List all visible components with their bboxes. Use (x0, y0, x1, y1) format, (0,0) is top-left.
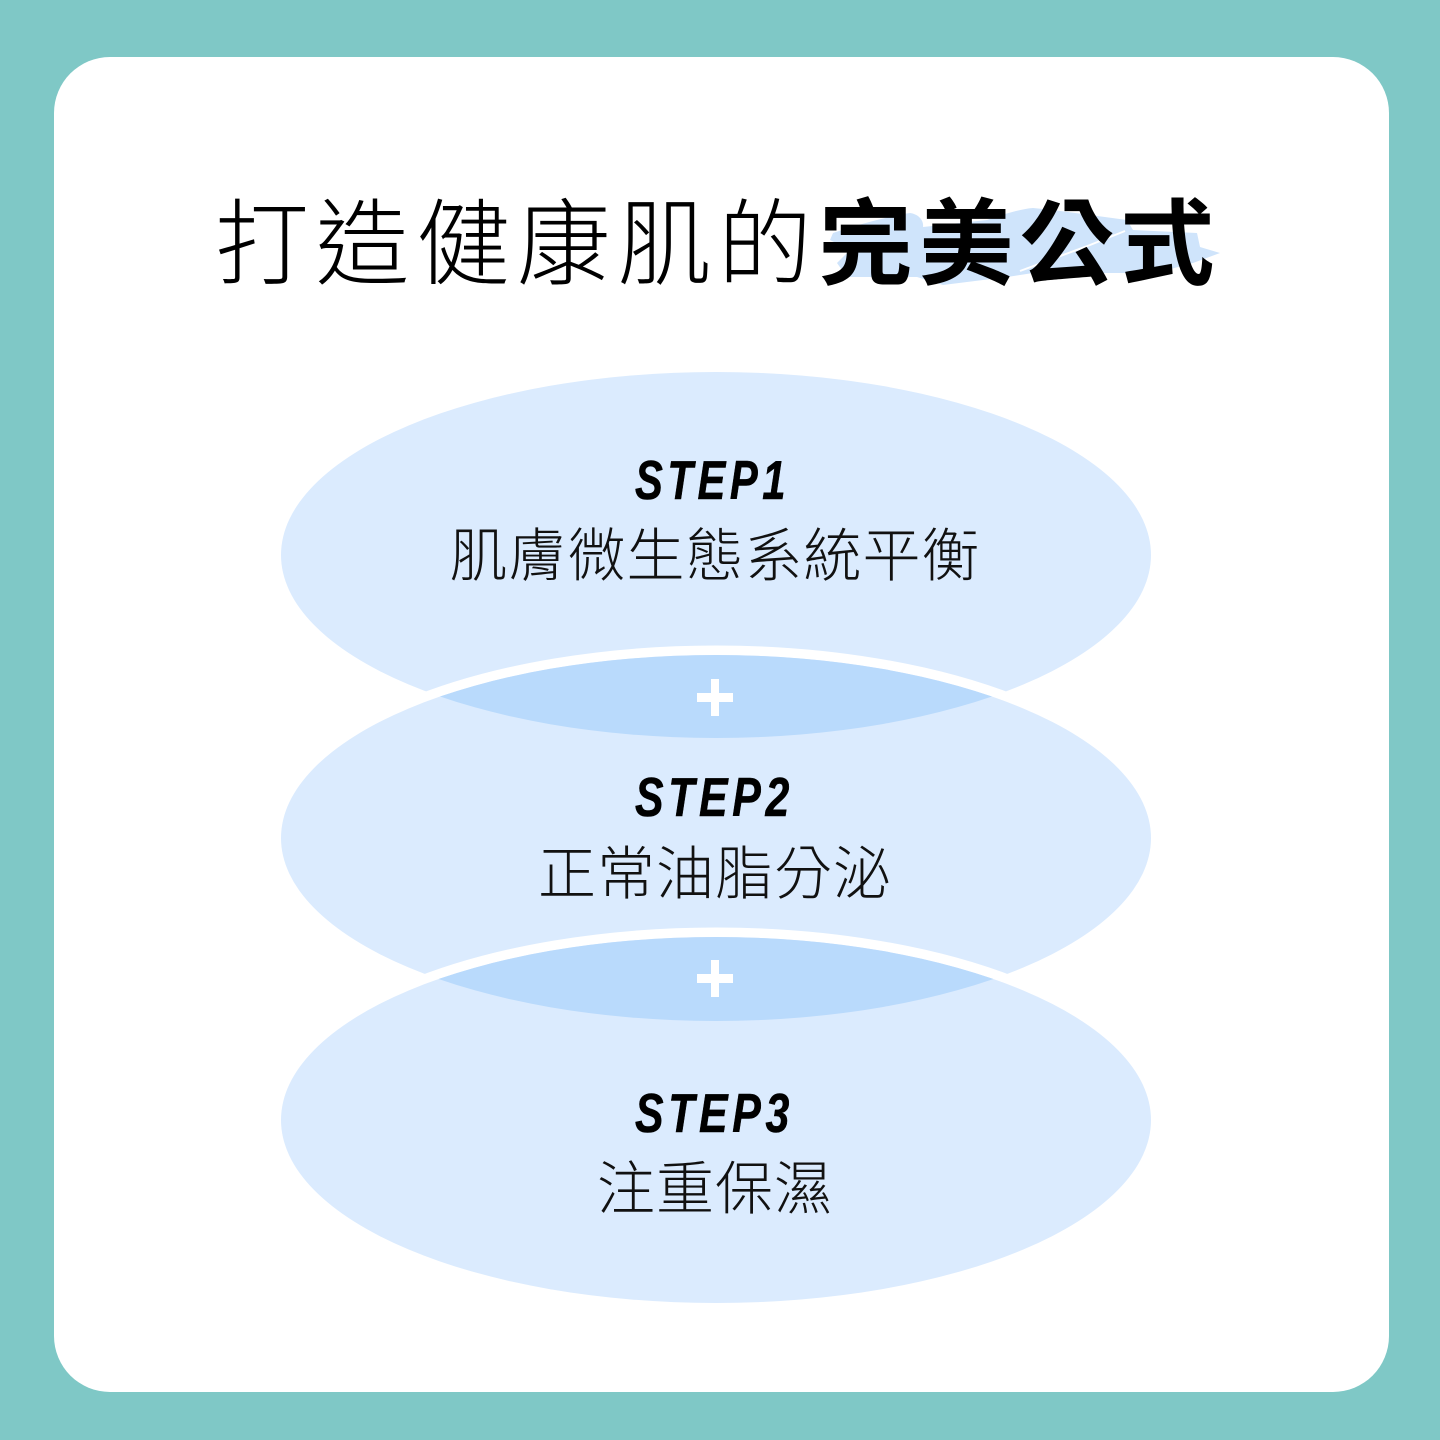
step 1 heading: STEP1 (635, 449, 790, 511)
overlap lens between step 1 and step 2 (440, 655, 992, 738)
title: 打造健康肌的完美公式 (215, 192, 1221, 297)
step 3 description: 注重保濕 (597, 1157, 833, 1222)
step 2 heading: STEP2 (635, 766, 794, 828)
step 3 heading: STEP3 (635, 1082, 794, 1144)
icon: plus between step 2 and step 3 (697, 960, 733, 997)
white outline of step 3 ellipse (281, 937, 1151, 1303)
step 2 description: 正常油脂分泌 (538, 842, 892, 907)
brush stroke highlight behind title (830, 208, 1220, 285)
overlap lens between step 2 and step 3 (439, 937, 993, 1021)
panel: step 1 ellipse (281, 372, 1151, 738)
panel: step 2 ellipse (281, 655, 1151, 1021)
step 1 description: 肌膚微生態系統平衡 (449, 524, 981, 589)
panel: step 3 ellipse (281, 937, 1151, 1303)
icon: plus between step 1 and step 2 (697, 679, 733, 716)
white outline of step 2 ellipse (281, 655, 1151, 1021)
